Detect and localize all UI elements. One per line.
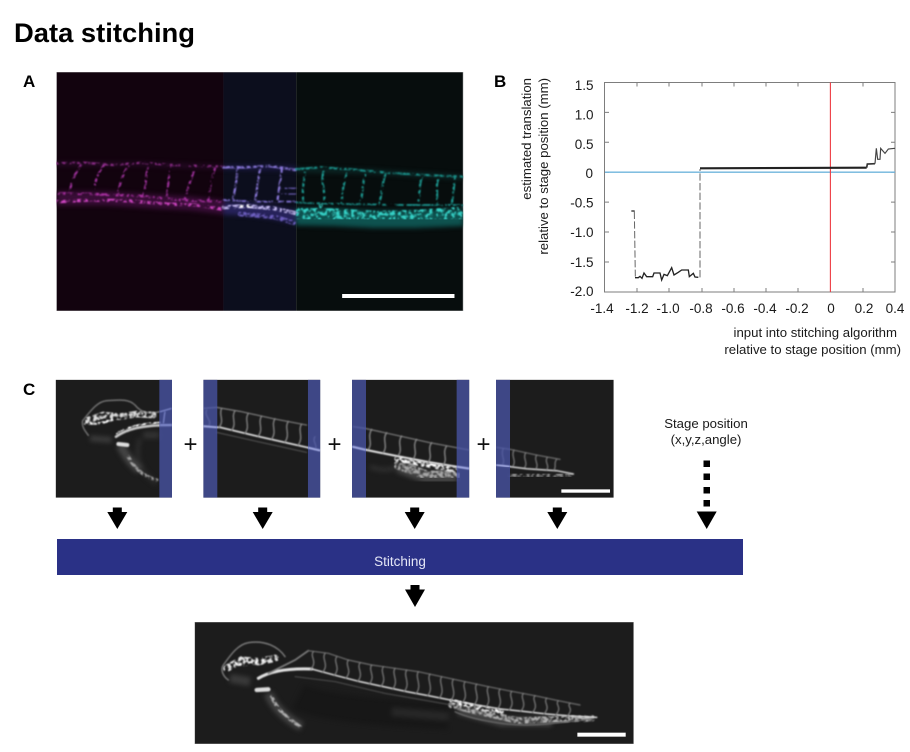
x axis tick labels: 0.2 xyxy=(855,301,873,316)
tile 2: fish trunk xyxy=(203,380,320,498)
tile 4: fish tail xyxy=(496,380,614,498)
overlap vessels xyxy=(223,166,296,223)
x axis title xyxy=(724,325,901,357)
x axis tick labels xyxy=(590,301,905,316)
stage position label: Stage position xyxy=(664,416,748,431)
y axis tick labels: 1.5 xyxy=(575,78,594,93)
plus sign: + xyxy=(327,431,342,458)
y axis tick labels: -0.5 xyxy=(570,196,594,210)
y axis tick labels: 1.0 xyxy=(575,108,594,122)
x axis tick labels: -0.8 xyxy=(689,301,713,316)
arrow: tile 4 to stitching xyxy=(547,508,567,529)
y axis title: relative to stage position (mm) xyxy=(536,78,551,255)
x axis tick labels: -0.6 xyxy=(721,301,745,316)
x axis tick labels: -1.4 xyxy=(590,301,614,316)
title: Data stitching xyxy=(14,18,195,48)
tile 3: fish mid-tail xyxy=(352,380,470,498)
y axis title xyxy=(519,78,551,255)
arrow: tile 2 to stitching xyxy=(253,508,273,529)
y axis tick labels xyxy=(570,78,594,299)
data series xyxy=(631,147,895,282)
tissue haze xyxy=(57,164,463,219)
x axis tick labels: 0 xyxy=(827,301,835,316)
scale bar xyxy=(577,733,626,737)
y axis tick labels: -1.0 xyxy=(570,225,594,240)
panel label C: C xyxy=(23,380,35,399)
x axis tick labels: 0.4 xyxy=(886,301,905,316)
panel label B: B xyxy=(494,72,506,91)
panel B: line chart of estimated translation xyxy=(519,78,905,357)
magenta tile vessels xyxy=(57,163,223,209)
y axis tick labels: -2.0 xyxy=(570,284,594,299)
zero reference lines xyxy=(605,82,895,292)
y axis title: estimated translation xyxy=(519,78,534,200)
y axis tick labels: 0 xyxy=(585,166,593,181)
arrow: stitching to result xyxy=(405,585,425,607)
dashed arrow: stage position to stitching xyxy=(697,460,717,529)
stage position label xyxy=(664,416,748,447)
scale bar xyxy=(342,294,454,298)
arrow: tile 3 to stitching xyxy=(405,508,425,529)
plot frame and ticks xyxy=(604,82,895,292)
x axis tick labels: -1.2 xyxy=(625,301,649,316)
x axis title: relative to stage position (mm) xyxy=(724,342,901,357)
panel label A: A xyxy=(23,72,35,91)
plus sign: + xyxy=(183,431,198,458)
x axis tick labels: -1.0 xyxy=(656,301,680,316)
x axis title: input into stitching algorithm xyxy=(734,325,897,340)
tile 1: fish head xyxy=(56,380,172,498)
cyan tile vessels xyxy=(296,167,463,205)
stitching bar: Stitching xyxy=(374,554,426,569)
stage position label: (x,y,z,angle) xyxy=(671,432,741,447)
panel A: overlapping fluorescence image xyxy=(56,72,464,311)
plus sign: + xyxy=(476,431,491,458)
x axis tick labels: -0.4 xyxy=(753,301,777,316)
stitched result image xyxy=(194,622,634,744)
arrow: tile 1 to stitching xyxy=(107,508,127,529)
stitching bar xyxy=(57,539,743,575)
scale bar xyxy=(561,489,610,493)
y axis tick labels: -1.5 xyxy=(570,255,594,270)
x axis tick labels: -0.2 xyxy=(785,301,809,316)
y axis tick labels: 0.5 xyxy=(575,137,594,152)
